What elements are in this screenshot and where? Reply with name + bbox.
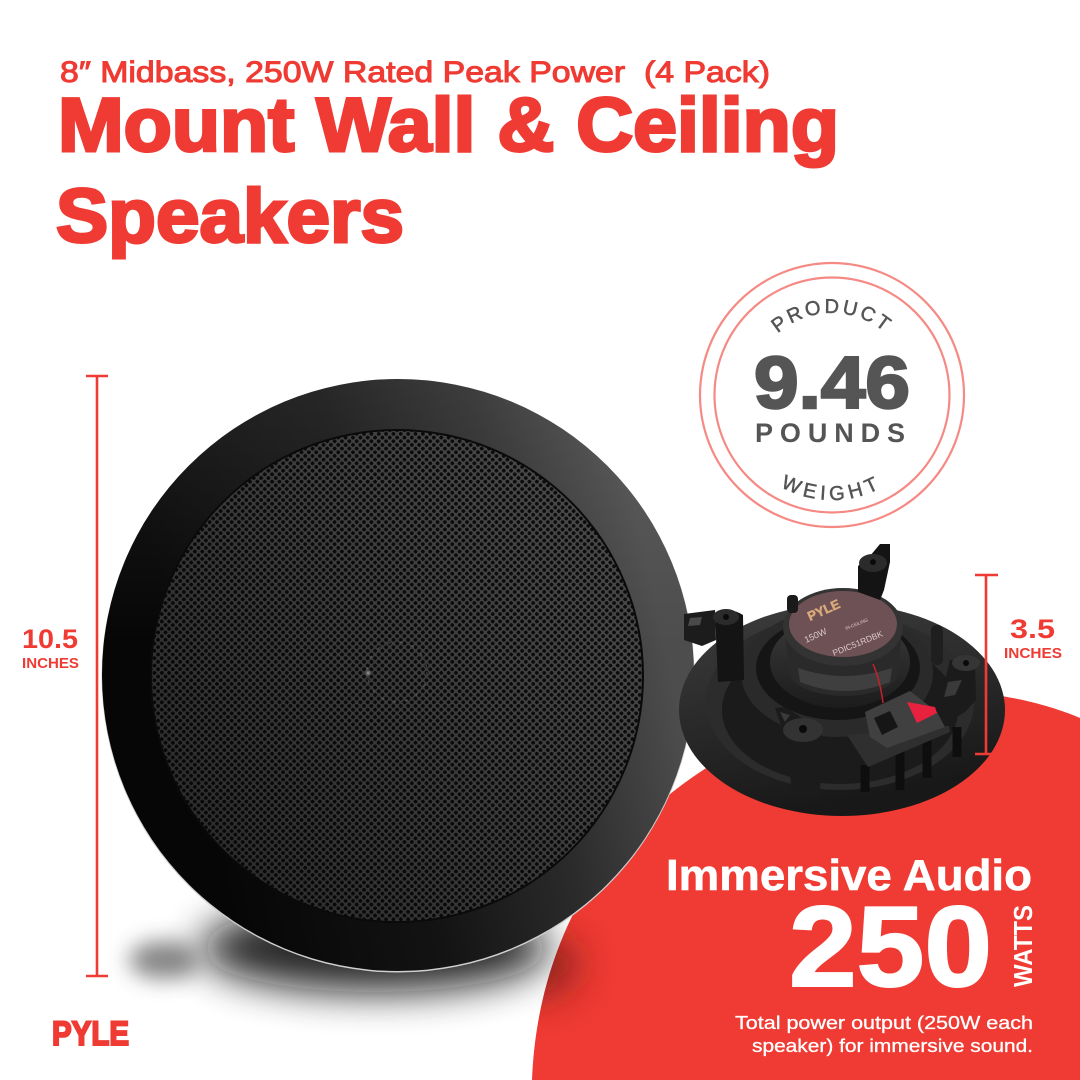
mount post: right [940, 655, 980, 722]
subtitle: 8″ Midbass, 250W Rated Peak Power (4 Pack) [60, 56, 770, 89]
wires [873, 664, 883, 703]
mount post: top [858, 544, 890, 600]
title: Speakers [56, 174, 404, 259]
speaker front view [102, 379, 694, 972]
title [56, 83, 839, 259]
speaker rear view: IN-CEILING [845, 617, 869, 631]
rim [679, 604, 1005, 816]
speaker rear view [679, 544, 1005, 816]
badge: product weight: WEIGHT [784, 474, 875, 500]
figure: 250 watts: 250 [789, 884, 992, 1011]
magnet label: PYLE [805, 596, 843, 624]
mount post: left [684, 609, 744, 682]
description: Total power output (250W each [735, 1013, 1033, 1033]
dimension: height 10.5 inches [22, 376, 108, 976]
badge: product weight: PRODUCT [770, 298, 892, 333]
badge: product weight [698, 262, 966, 528]
badge: product weight: POUNDS [755, 418, 905, 448]
dimension: height 10.5 inches: INCHES [22, 656, 79, 672]
peg: right [931, 625, 943, 665]
speaker shadow on red [493, 935, 577, 995]
red corner background shape [532, 693, 1080, 1080]
badge: product weight: 9.46 [754, 343, 910, 424]
speaker rear view: PDIC51RDBK [831, 628, 885, 658]
magnet cap [783, 588, 903, 666]
description: speaker) for immersive sound. [752, 1036, 1033, 1056]
magnet body [784, 630, 902, 696]
basket [741, 609, 933, 737]
speaker rear view: 150W [803, 626, 829, 645]
mount post: lower left [775, 707, 823, 796]
heading: immersive audio: Immersive Audio [666, 851, 1032, 900]
title: Mount Wall & Ceiling [58, 83, 839, 168]
speaker shadow on white [129, 904, 550, 992]
terminal block [847, 691, 957, 792]
dimension: height 10.5 inches: 10.5 [22, 624, 78, 654]
figure: 250 watts: WATTS [1008, 905, 1038, 987]
peg: top [787, 595, 798, 613]
logo: Pyle: PYLE [52, 1015, 129, 1053]
description [735, 1013, 1033, 1056]
center logo mark [366, 642, 427, 702]
dimension: depth 3.5 inches: INCHES [1004, 646, 1062, 662]
dimension: depth 3.5 inches [975, 575, 1062, 754]
dimension: depth 3.5 inches: 3.5 [1010, 614, 1055, 644]
